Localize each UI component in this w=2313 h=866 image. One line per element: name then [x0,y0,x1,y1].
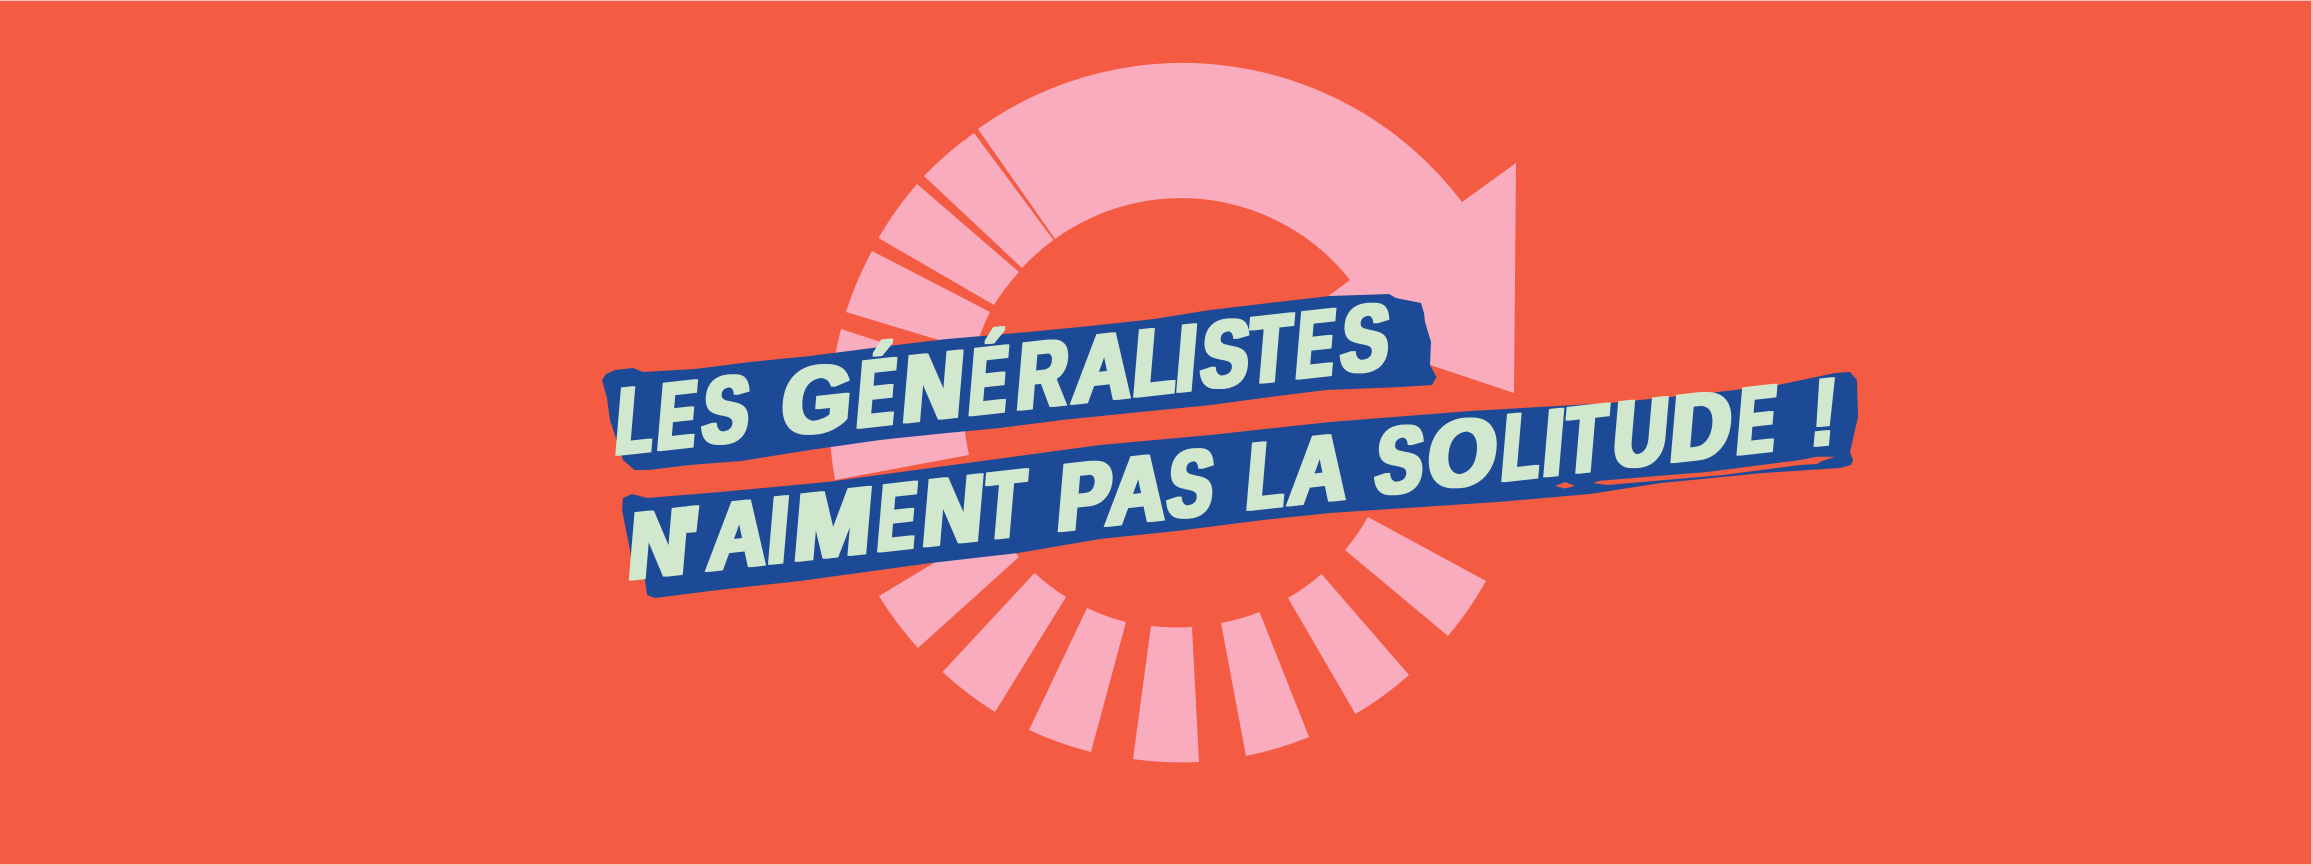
tail segment 1 [924,133,1054,268]
banner tear: small hole [1555,482,1575,488]
title line 1: R [1014,320,1072,431]
title line 1: N [899,331,967,443]
title line 2: M [790,468,876,582]
title line 2: ! [1809,359,1840,467]
title line 1: E [1293,290,1338,399]
title line 2: S [1164,429,1217,540]
title line 1: G [778,344,856,457]
title line 2: T [981,450,1028,560]
tail segment 10 [1288,574,1409,714]
title line 1: E [655,361,700,471]
title line 2: I [1540,390,1567,497]
title line 1: I [1173,305,1200,413]
title line 2: A [705,479,772,591]
title line 2: E [1734,366,1779,475]
title line 2: D [1667,371,1736,483]
title line 1: A [1070,312,1137,424]
tail segment 9 [1221,612,1309,756]
title line 2: T [1561,385,1610,495]
banner tear: long sliver [1593,457,1835,485]
title line 1: S [699,355,753,466]
tail segment 4 [829,329,969,480]
title line 2 [625,359,1840,600]
tail segment 3 [846,251,990,351]
title line 2: U [1610,378,1672,489]
banner: first line background [602,294,1436,470]
title line 2: L [1498,392,1544,502]
title line 2: A [1286,414,1352,526]
title line 2: O [1424,397,1501,510]
tail segment 7 [1029,608,1126,752]
title line 2: P [1054,441,1115,552]
title line 2: A [1104,434,1171,546]
title line 2: ' [680,487,701,594]
title line 1 [613,284,1393,475]
tail segment 8 [1133,626,1199,762]
title line 1: S [1338,284,1393,394]
banner: second line background [622,372,1858,598]
title line 2: N [625,488,692,600]
tail segment 6 [942,573,1066,712]
arrow head and solid arc [978,63,1516,393]
title line 1: É [966,326,1011,436]
title line 2: N [919,455,987,567]
title line 1: T [1245,295,1295,405]
title line 2: I [765,477,792,585]
title line 1: É [854,339,899,448]
title line 2: E [875,463,920,572]
title line 1: L [613,366,657,475]
title line 1: S [1198,299,1253,410]
title line 2: L [1243,421,1289,531]
title line 1: L [1130,307,1181,418]
tail segment 2 [878,184,1019,305]
title line 2: S [1372,405,1427,516]
icon: circular arrow with fragmented tail [829,63,1516,762]
tail segment 11 [1345,517,1486,636]
tail segment 5 [879,525,1019,648]
